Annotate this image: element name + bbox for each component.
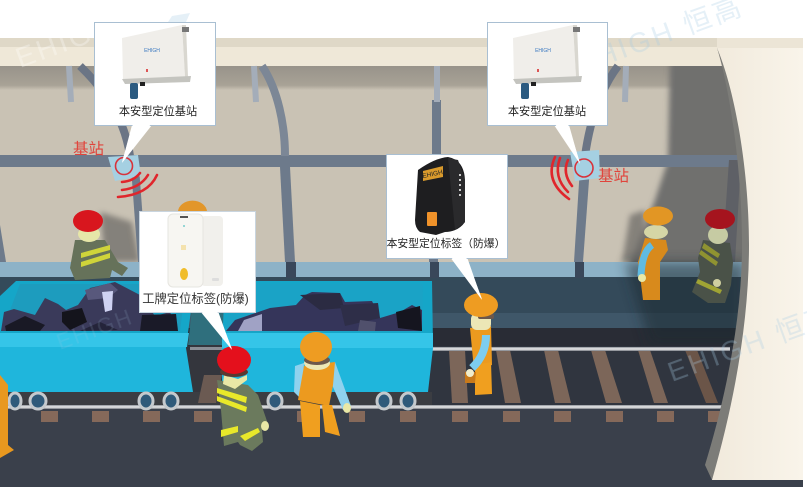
track bed <box>0 345 803 487</box>
coal pile <box>1 282 178 331</box>
watermark: EHIGH <box>53 304 137 355</box>
callout: intrinsically safe tag: 本安型定位标签（防爆） <box>387 236 505 250</box>
worker: hidden orange helmet <box>178 201 207 212</box>
watermark: EHIGH <box>11 9 119 74</box>
icon: base station device: EHIGH <box>535 48 551 54</box>
mine cart 2 <box>222 281 433 392</box>
icon: black tag device: EHIGH <box>422 169 444 180</box>
callout: badge tag <box>140 212 256 350</box>
platform and skirting <box>0 262 745 346</box>
signal waves <box>552 157 572 199</box>
label: right base station: 基站 <box>598 167 629 185</box>
worker: back right red helmet <box>692 209 735 303</box>
coal pile <box>226 292 422 331</box>
icon: white badge devices <box>168 214 223 287</box>
callout: base station right: 本安型定位基站 <box>508 104 586 118</box>
steel supports <box>0 100 745 262</box>
base station right <box>552 150 600 199</box>
base station left <box>108 155 157 197</box>
icon: base station device <box>122 25 191 99</box>
signal waves <box>118 173 157 197</box>
mine cart 1 <box>0 281 224 392</box>
icon: black tag device <box>415 157 465 235</box>
callout: intrinsically safe tag <box>386 154 508 300</box>
worker: front orange <box>294 332 351 437</box>
icon: base station device: EHIGH <box>144 48 160 54</box>
callout: base station left: 本安型定位基站 <box>119 104 197 118</box>
icon: base station device <box>513 25 582 99</box>
worker: back right orange <box>638 206 673 300</box>
tunnel arch <box>705 38 803 480</box>
label: left base station: 基站 <box>73 140 104 158</box>
upper brackets and conduits <box>69 66 626 156</box>
worker: left edge orange <box>0 375 14 458</box>
wall shadows behind workers <box>100 210 645 262</box>
callout: badge tag: 工牌定位标签(防爆) <box>142 291 249 306</box>
worker: back left with red helmet <box>70 210 128 280</box>
worker: walking on rails <box>464 293 498 395</box>
callout: base station right <box>488 22 608 164</box>
tunnel wall <box>0 38 760 268</box>
cart wheels <box>9 393 415 409</box>
worker: front red helmet <box>217 346 269 451</box>
watermark <box>11 0 807 388</box>
callout: base station left <box>94 22 216 163</box>
